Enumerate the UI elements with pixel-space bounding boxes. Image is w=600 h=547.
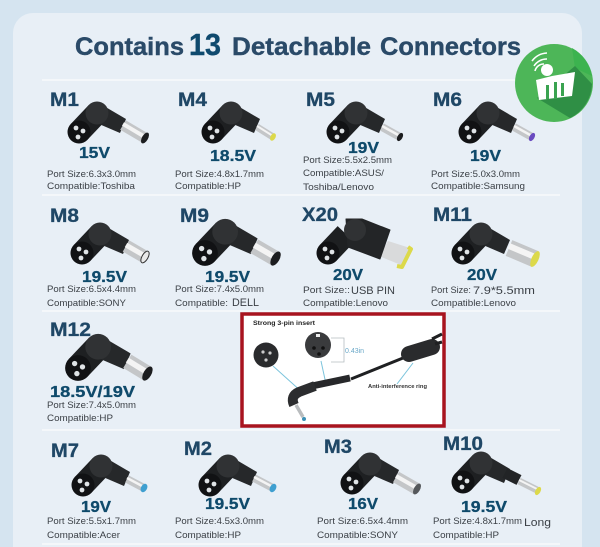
title: 13 (189, 27, 221, 62)
title: Connectors (380, 33, 521, 61)
connector card: X20: Compatible:Lenovo (303, 298, 388, 309)
connector card: M10 (433, 434, 551, 541)
panel: strong 3-pin insert photo (242, 314, 444, 426)
connector card: M4: Port Size:4.8x1.7mm (175, 169, 264, 180)
connector card: M1: M1 (50, 90, 79, 111)
connector card: M6: M6 (433, 90, 462, 111)
connector card: M8 (47, 206, 151, 309)
connector card: X20: X20 (302, 205, 338, 226)
connector card: M12: Port Size:7.4x5.0mm (47, 400, 136, 411)
connector card: M11: M11 (433, 205, 472, 226)
connector card: M2: M2 (184, 439, 212, 460)
connector card: M1: Compatible:Toshiba (47, 181, 136, 192)
title (75, 27, 521, 62)
connector card: X20: USB PIN (351, 285, 395, 297)
connector card: M7: M7 (51, 441, 79, 462)
connector card: M5: Toshiba/Lenovo (303, 182, 374, 193)
connector card: X20 (302, 205, 411, 309)
connector card: M11: Compatible:Lenovo (431, 298, 516, 309)
connector card: M10: M10 (443, 434, 483, 455)
connector card: M11: 20V (467, 267, 498, 284)
connector card: M8: M8 (50, 206, 79, 227)
connector card: M10: Compatible:HP (433, 530, 499, 541)
connector card: M9: M9 (180, 206, 209, 227)
connector card: M3: 16V (348, 496, 379, 513)
connector card: M12: Compatible:HP (47, 413, 113, 424)
connector card: M5: 19V (348, 140, 380, 157)
connector card: M12: 18.5V/19V (50, 384, 136, 401)
connector card: M9: Compatible: (175, 298, 228, 309)
connector card: M8: 19.5V (82, 269, 128, 286)
connector card: M9: 19.5V (205, 269, 251, 286)
connector card: M12 (47, 320, 155, 424)
connector card: M9: Port Size:7.4x5.0mm (175, 284, 264, 295)
connector card: M7: 19V (81, 499, 112, 516)
connector card: M4: Compatible:HP (175, 181, 241, 192)
title: Contains (75, 33, 184, 61)
cable and plug (293, 334, 442, 421)
connector card: M3: Compatible:SONY (317, 530, 399, 541)
connector card: M4 (175, 90, 277, 192)
connector card: M11 (431, 205, 542, 309)
connector card: M11: 7.9*5.5mm (473, 285, 535, 297)
icon: green logo badge (515, 44, 593, 122)
connector card: M7: Port Size:5.5x1.7mm (47, 516, 136, 527)
connector card: M5 (303, 90, 404, 193)
connector card: M3: Port Size:6.5x4.4mm (317, 516, 408, 527)
connector card: M1: 15V (79, 145, 111, 162)
ring label: Anti-interference ring (368, 384, 428, 390)
title: Detachable (232, 33, 371, 61)
connector card: M2: Port Size:4.5x3.0mm (175, 516, 264, 527)
connector card: M4: M4 (178, 90, 207, 111)
connector card: M10: Long (524, 517, 551, 529)
plug faces (254, 332, 331, 368)
connector card: M3: M3 (324, 437, 352, 458)
connector card: X20: 20V (333, 267, 364, 284)
connector card: M9: DELL (232, 297, 259, 309)
connector card: M2: Compatible:HP (175, 530, 241, 541)
connector card: M4: 18.5V (210, 148, 257, 165)
connector card: X20: Port Size:: (303, 285, 350, 296)
connector card: M8: Compatible:SONY (47, 298, 127, 309)
connector card: M6: Port Size:5.0x3.0mm (431, 169, 520, 180)
connector card: M12: M12 (50, 320, 91, 341)
connector card: M5: M5 (306, 90, 335, 111)
connector card: M6 (431, 90, 536, 192)
connector card: M6: Compatible:Samsung (431, 181, 525, 192)
photo caption: Strong 3-pin insert (253, 320, 316, 327)
connector card: M11: Port Size: (431, 285, 471, 296)
connector card: M1 (47, 90, 151, 192)
connector card: M7: Compatible:Acer (47, 530, 120, 541)
connector card: M10: Port Size:4.8x1.7mm (433, 516, 522, 527)
dimension label: 0.43in (345, 348, 364, 355)
connector card: M6: 19V (470, 148, 502, 165)
connector card: M1: Port Size:6.3x3.0mm (47, 169, 136, 180)
connector card: M3 (317, 437, 423, 541)
connector card: M10: 19.5V (461, 499, 508, 516)
connector card: M7 (47, 441, 149, 541)
connector card: M2 (175, 439, 278, 541)
connector card: M5: Compatible:ASUS/ (303, 168, 384, 179)
connector card: M9 (175, 206, 283, 309)
connector card: M8: Port Size:6.5x4.4mm (47, 284, 136, 295)
connector card: M2: 19.5V (205, 496, 251, 513)
connector card: M5: Port Size:5.5x2.5mm (303, 155, 392, 166)
